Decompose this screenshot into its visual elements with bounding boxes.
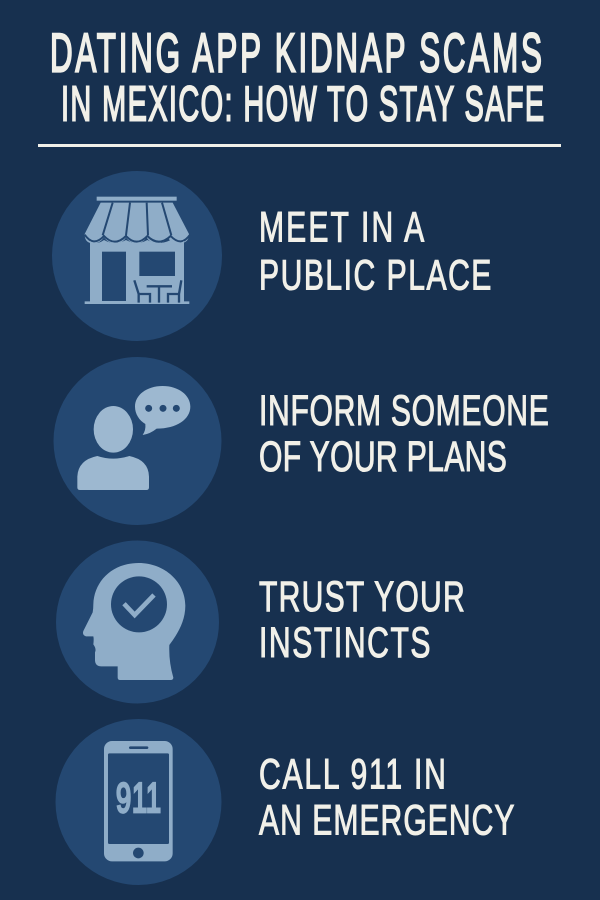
text: inform someone of your plans: OF YOUR PLANS: [259, 432, 507, 480]
text: meet in a public place: PUBLIC PLACE: [259, 250, 491, 299]
text: trust your instincts: [259, 572, 465, 666]
panel: inform someone of your plans: [54, 357, 549, 525]
title: DATING APP KIDNAP SCAMS: [50, 22, 542, 84]
panel: meet in a public place: [52, 171, 491, 341]
icon: person with speech bubble: [54, 357, 222, 525]
text: trust your instincts: TRUST YOUR: [259, 572, 465, 620]
icon: phone showing 911: 911: [116, 775, 161, 821]
icon: phone showing 911: [56, 719, 222, 885]
text: inform someone of your plans: [259, 386, 549, 480]
text: call 911 in an emergency: [259, 749, 514, 844]
text: meet in a public place: [259, 202, 491, 299]
panel: call 911 in an emergency: [56, 719, 514, 885]
text: trust your instincts: INSTINCTS: [259, 618, 430, 666]
title: [50, 22, 544, 131]
icon: storefront with cafe table: [52, 171, 222, 341]
icon: head with check mark: [56, 540, 219, 704]
text: inform someone of your plans: INFORM SOMEONE: [259, 386, 549, 434]
title: IN MEXICO: HOW TO STAY SAFE: [61, 77, 544, 131]
text: meet in a public place: MEET IN A: [259, 202, 424, 251]
panel: trust your instincts: [56, 540, 465, 704]
text: call 911 in an emergency: AN EMERGENCY: [259, 795, 514, 844]
text: call 911 in an emergency: CALL 911 IN: [259, 749, 446, 798]
